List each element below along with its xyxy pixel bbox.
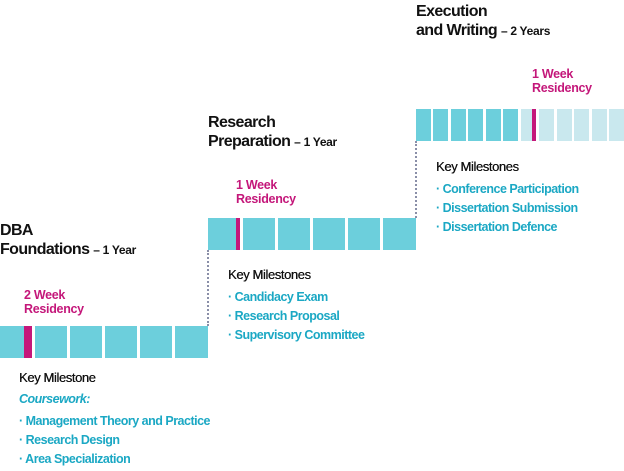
bar stage 2: [208, 218, 416, 250]
milestones stage 3: [436, 159, 579, 234]
heading: Execution and Writing: Execution: [416, 3, 487, 20]
milestones stage 2: · Candidacy Exam: [228, 290, 328, 304]
residency label stage 1: Residency: [24, 302, 84, 316]
bar stage 1: [0, 326, 208, 358]
residency label stage 3: [532, 67, 592, 94]
residency label stage 3: 1 Week: [532, 67, 573, 81]
milestones stage 2: · Research Proposal: [228, 309, 339, 323]
heading: DBA Foundations: [0, 222, 136, 258]
residency label stage 2: [236, 178, 296, 206]
residency label stage 1: [24, 288, 84, 316]
milestones stage 3: · Dissertation Defence: [436, 220, 557, 234]
milestones stage 1: Key Milestone: [19, 370, 95, 385]
milestones stage 1: · Area Specialization: [19, 452, 130, 466]
residency label stage 2: 1 Week: [236, 178, 277, 192]
heading: Research Preparation: [208, 114, 337, 150]
bar stage 3: [416, 109, 624, 141]
milestones stage 3: · Dissertation Submission: [436, 201, 578, 215]
milestones stage 1: · Research Design: [19, 433, 120, 447]
milestones stage 1: [19, 370, 210, 466]
heading: DBA Foundations: Foundations – 1 Year: [0, 241, 136, 258]
heading: Execution and Writing: and Writing – 2 Years: [416, 22, 550, 39]
heading: Execution and Writing: [416, 3, 550, 39]
milestones stage 2: · Supervisory Committee: [228, 328, 364, 342]
residency label stage 3: Residency: [532, 80, 592, 94]
milestones stage 2: Key Milestones: [228, 267, 311, 282]
milestones stage 1: · Management Theory and Practice: [19, 414, 210, 428]
milestones stage 2: [228, 267, 364, 342]
heading: Research Preparation: Research: [208, 114, 275, 131]
milestones stage 3: Key Milestones: [436, 159, 519, 174]
residency label stage 1: 2 Week: [24, 288, 65, 302]
milestones stage 3: · Conference Participation: [436, 182, 579, 196]
residency label stage 2: Residency: [236, 192, 296, 206]
heading: DBA Foundations: DBA: [0, 222, 33, 239]
milestones stage 1: Coursework:: [19, 392, 90, 406]
heading: Research Preparation: Preparation – 1 Year: [208, 133, 337, 150]
